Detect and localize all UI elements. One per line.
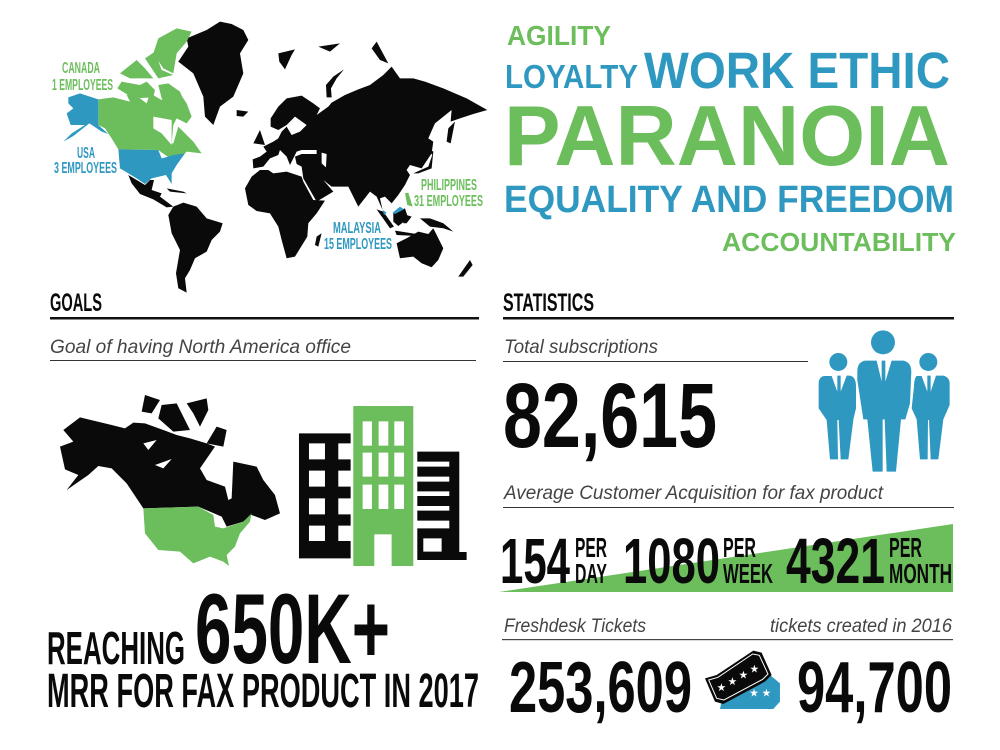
goal statement (47, 573, 479, 718)
building: center (353, 406, 413, 566)
label: Canada (52, 60, 113, 94)
map labels (52, 60, 483, 253)
figure: per day: DAY (575, 558, 607, 589)
stars: ★ (750, 663, 759, 676)
acquisition figures (500, 525, 952, 597)
world map (63, 22, 487, 293)
word: Agility: AGILITY (507, 20, 611, 51)
word: Accountability: ACCOUNTABILITY (722, 227, 956, 257)
person: center (857, 330, 911, 472)
label: Malaysia: 15 EMPLOYEES (324, 236, 392, 253)
figure: per month: 4321 (786, 525, 885, 597)
word: Loyalty: LOYALTY (505, 58, 638, 95)
map: Philippines (405, 193, 413, 207)
stars: ★ (717, 681, 726, 694)
word: Equality and Freedom: EQUALITY AND FREEDOM (504, 179, 954, 221)
word cloud (504, 20, 956, 257)
text: freshdesk tickets: Freshdesk Tickets (504, 616, 646, 637)
heading: goals: GOALS (50, 289, 102, 317)
label: Philippines: PHILIPPINES (421, 177, 477, 194)
panel: statistics (499, 289, 954, 728)
figure: per day: 154 (500, 525, 570, 597)
ticket: blue (720, 675, 780, 709)
label: Malaysia: MALAYSIA (333, 220, 381, 237)
label: USA: USA (77, 145, 95, 162)
map: black continents (128, 22, 487, 293)
stars: ★ (749, 687, 759, 700)
label: USA (54, 145, 117, 177)
heading: statistics: STATISTICS (503, 289, 594, 317)
person: right (912, 353, 950, 459)
text: total subscriptions: Total subscriptions (504, 337, 658, 358)
stars: ★ (762, 687, 771, 700)
goal statement: MRR FOR FAX PRODUCT IN 2017 (47, 665, 479, 718)
map: Caspian Sea (322, 153, 327, 167)
word: Work Ethic: WORK ETHIC (644, 42, 950, 99)
stars (717, 663, 771, 700)
text: customer acquisition: Average Customer Acquisition for fax product (503, 483, 884, 504)
figure: per week: WEEK (723, 558, 773, 589)
label: Malaysia (324, 220, 392, 253)
chart: green growth wedge (499, 524, 953, 592)
figure: per month: PER (889, 532, 922, 563)
stars: ★ (739, 669, 748, 682)
number: subscriptions: 82,615 (503, 365, 717, 467)
building: left (299, 433, 351, 558)
figure: per week: 1080 (623, 525, 720, 597)
icon: three people (819, 330, 950, 472)
label: Canada: CANADA (62, 60, 100, 77)
map: USA (63, 93, 404, 215)
map: Canada (98, 28, 202, 158)
figure: per month: MONTH (889, 558, 952, 589)
goal statement: 650K+ (195, 573, 390, 684)
icon: office buildings (299, 406, 467, 566)
figure: per day: PER (575, 532, 607, 563)
text: tickets created: tickets created in 2016 (770, 616, 952, 637)
building: right (417, 452, 467, 560)
label: Philippines: 31 EMPLOYEES (414, 193, 483, 210)
ticket: black (705, 651, 772, 704)
goal statement: REACHING (47, 622, 185, 674)
label: Canada: 1 EMPLOYEES (52, 77, 113, 94)
panel: goals (47, 289, 479, 718)
label: Philippines (414, 177, 483, 210)
icon: tickets (705, 651, 780, 709)
word: Paranoia: PARANOIA (504, 89, 950, 184)
figure: per week: PER (723, 532, 756, 563)
icon: North America map (60, 395, 280, 566)
label: USA: 3 EMPLOYEES (54, 160, 117, 177)
text: goal of office: Goal of having North America office (50, 337, 351, 358)
person: left (819, 353, 856, 459)
number: total tickets: 253,609 (509, 648, 692, 728)
stars: ★ (728, 675, 737, 688)
